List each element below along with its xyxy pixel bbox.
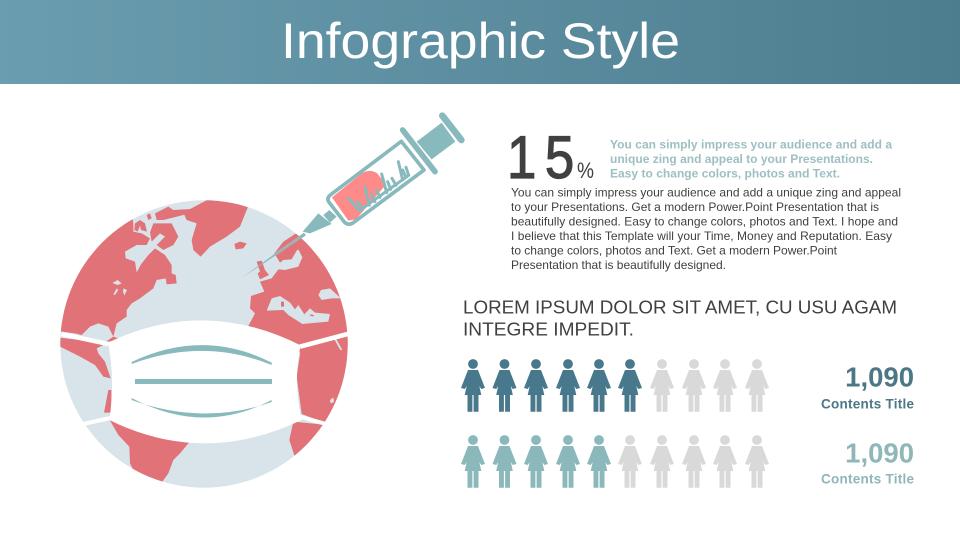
plunger (417, 123, 455, 159)
globe ocean (60, 200, 348, 488)
body paragraph: to change colors, photos and Text. Get a modern Power.Point (511, 244, 838, 258)
metric 2: 1,090 (845, 438, 914, 468)
header banner (0, 0, 960, 84)
black sea (318, 288, 341, 300)
great lakes (112, 280, 127, 296)
globe with mask (60, 200, 348, 488)
measurement ticks (348, 162, 409, 211)
body paragraph: You can simply impress your audience and add a unique zing and appeal (511, 186, 901, 200)
face mask (108, 320, 302, 443)
body paragraph (511, 186, 901, 272)
body paragraph: Presentation that is beautifully designed. (511, 258, 726, 272)
section heading (463, 296, 897, 340)
statistic description: Easy to change colors, photos and Text. (610, 166, 840, 180)
statistic 15% (507, 124, 594, 191)
barrel, fluid and plunger (328, 116, 461, 224)
percent sign: % (577, 158, 594, 183)
pictogram row 2 (461, 435, 769, 488)
mask straps (61, 333, 350, 424)
metric 2 (821, 438, 914, 486)
seas (112, 280, 342, 403)
iceland, britain, europe and north africa (234, 234, 348, 353)
metric 2: Contents Title (821, 472, 914, 486)
islands in the mediterranean (281, 302, 314, 316)
statistic description (610, 138, 892, 180)
needle and hub (242, 210, 337, 278)
section heading: LOREM IPSUM DOLOR SIT AMET, CU USU AGAM (463, 296, 897, 318)
metric 1 (821, 362, 914, 412)
body paragraph: beautifully designed. Easy to change colors, photos and Text. I hope and (511, 214, 898, 228)
metric 1: Contents Title (821, 396, 914, 412)
syringe (242, 116, 461, 278)
barrel (328, 141, 424, 224)
pictogram row 1 (461, 359, 769, 412)
fluid (332, 171, 386, 221)
statistic description: You can simply impress your audience and add a (610, 138, 892, 152)
statistic description: unique zing and appeal to your Presentations. (610, 152, 873, 166)
north america (60, 206, 190, 342)
big number: 15 (507, 124, 574, 191)
flange (403, 130, 435, 172)
body paragraph: I believe that this Template will your Time, Money and Reputation. Easy (511, 229, 892, 243)
madagascar spot (330, 397, 334, 403)
metric 1: 1,090 (845, 362, 914, 392)
section heading: INTEGRE IMPEDIT. (463, 318, 634, 340)
continents (60, 200, 348, 482)
body paragraph: to your Presentations. Get a modern Power.Point Presentation that is (511, 200, 879, 214)
east africa rift (334, 339, 342, 350)
title: Infographic Style (281, 13, 680, 69)
mask pleats (132, 345, 272, 418)
greenland and southern continents (57, 197, 360, 484)
mediterranean (258, 296, 330, 324)
